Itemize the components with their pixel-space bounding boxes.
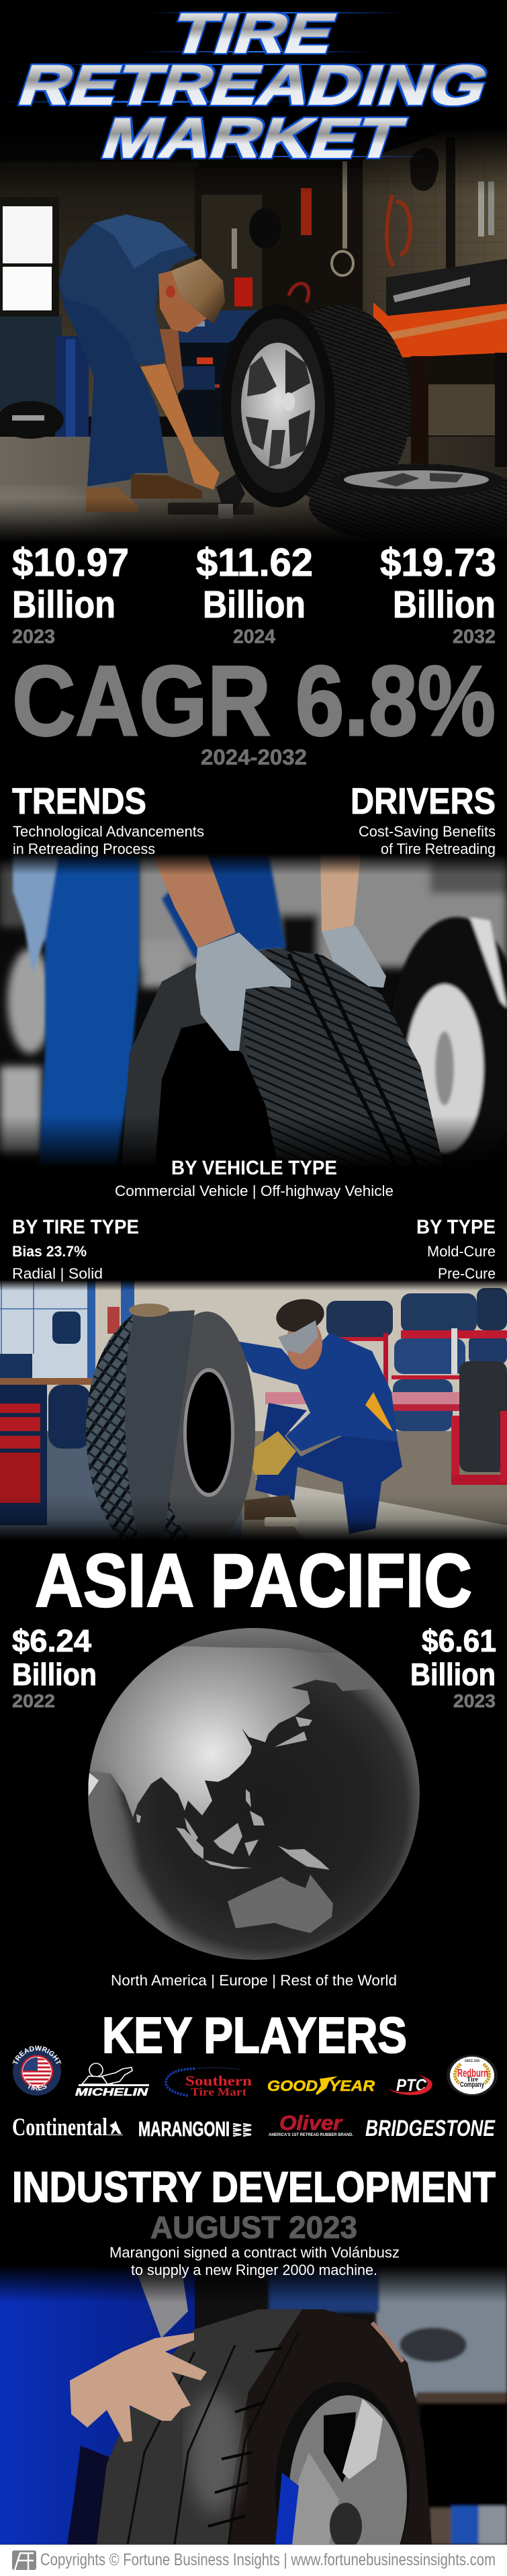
by type: Mold-Cure (427, 1243, 496, 1260)
logo: Goodyear: YEAR (329, 2077, 375, 2094)
by vehicle type: BY VEHICLE TYPE (171, 1157, 337, 1179)
market size 2024: Billion (203, 583, 306, 626)
by tire type: Bias 23.7% (12, 1243, 87, 1260)
market size 2023: 2023 (12, 626, 55, 648)
regional value 2023 (410, 1623, 496, 1711)
jacket (0, 2266, 195, 2544)
market size 2023 (12, 541, 129, 648)
logo: Southern Tire Mart: Tire Mart (191, 2086, 246, 2098)
logo: Treadwright Tires: TREADWRIGHT (12, 2045, 62, 2064)
footer (0, 2544, 507, 2576)
logo: Redburn Tire Company: Redburn (457, 2067, 488, 2079)
indian ocean glow (88, 1774, 176, 1942)
back arm (158, 329, 184, 394)
logo: Treadwright Tires: TIRES (28, 2083, 47, 2091)
development text: Marangoni signed a contract with Volánbusz (109, 2244, 400, 2261)
boots (86, 487, 139, 512)
logo: Southern Tire Mart (166, 2067, 252, 2098)
drivers (351, 780, 496, 857)
australia (228, 1875, 333, 1933)
head (158, 271, 207, 333)
development text (109, 2244, 400, 2278)
logo: PTC: PTC (396, 2076, 427, 2095)
other regions: North America | Europe | Rest of the World (111, 1972, 397, 1989)
alloy wheel (275, 2382, 410, 2576)
development text: to supply a new Ringer 2000 machine. (131, 2262, 377, 2278)
photo: mechanic in garage with tire (0, 111, 507, 544)
CAGR: 2024-2032 (201, 745, 307, 769)
backdrop (269, 2266, 507, 2544)
regional value 2022: Billion (12, 1657, 97, 1692)
blurred backdrop (0, 853, 507, 1154)
asia (88, 1646, 380, 1817)
right wheel (401, 915, 507, 1154)
red can (234, 277, 252, 306)
regional value 2022: $6.24 (12, 1623, 91, 1658)
by tire type (12, 1216, 139, 1282)
left wall (0, 161, 198, 417)
photo: mechanic's hand on tire (0, 2266, 507, 2576)
market size 2023: Billion (12, 583, 116, 626)
regional value 2023: 2023 (453, 1690, 496, 1711)
drivers: Cost-Saving Benefits (359, 823, 496, 840)
market size 2024: 2024 (233, 626, 275, 648)
floor tool (168, 474, 254, 519)
title: RETREADING (11, 54, 497, 117)
logo: Redburn Tire Company: SINCE 1954 (465, 2059, 479, 2063)
trends: in Retreading Process (13, 841, 155, 857)
tire (122, 948, 443, 1166)
hanging tools (232, 137, 494, 302)
drivers: of Tire Retreading (381, 841, 496, 857)
by type (416, 1216, 496, 1282)
logo: Redburn Tire Company: Tire (467, 2076, 479, 2084)
title: MARKET (95, 108, 411, 170)
logo: Redburn Tire Company (447, 2055, 498, 2096)
globe showing Asia Pacific (88, 1626, 420, 1960)
market size 2032 (380, 541, 496, 648)
back workshop (195, 183, 198, 261)
regional value 2023: Billion (410, 1657, 496, 1692)
photo: technician inspecting tire in workshop (0, 1280, 507, 1559)
logo: Southern Tire Mart: Southern (185, 2073, 252, 2089)
logo: Oliver (269, 2111, 353, 2137)
technician (236, 1295, 402, 1534)
logo: Goodyear (267, 2076, 375, 2095)
trousers (13, 853, 286, 1166)
big tire with alloy wheel (221, 304, 411, 507)
right wall (363, 134, 507, 359)
trends (12, 780, 204, 857)
title (0, 3, 500, 170)
trends: Technological Advancements (13, 823, 204, 840)
by tire type: BY TIRE TYPE (12, 1216, 139, 1238)
floor (0, 437, 507, 544)
gloves (195, 933, 291, 1051)
heading: key players: KEY PLAYERS (102, 2007, 407, 2063)
title: TIRE (165, 3, 344, 65)
shirt (58, 214, 197, 367)
market size 2032: $19.73 (380, 541, 496, 585)
logo: Redburn Tire Company: Company (460, 2081, 485, 2089)
photo: gloved hands holding tire (0, 853, 507, 1172)
logo: Michelin (75, 2063, 149, 2098)
arabia (88, 1772, 99, 1796)
by vehicle type (115, 1157, 394, 1199)
logo: Continental: Continental (12, 2114, 107, 2141)
logo: Oliver: AMERICA'S 1ST RETREAD RUBBER BRAND. (269, 2133, 353, 2137)
mechanic (58, 214, 225, 512)
regional value 2022: 2022 (12, 1690, 55, 1711)
by tire type: Radial | Solid (12, 1265, 103, 1282)
logo: Marangoni: MARANGONI (138, 2117, 230, 2141)
market size 2032: Billion (393, 583, 496, 626)
flat tire (309, 464, 507, 535)
regional value 2023: $6.61 (422, 1623, 496, 1658)
development date: AUGUST 2023 (150, 2210, 357, 2245)
trends: TRENDS (12, 780, 146, 822)
logo: Oliver: Oliver (279, 2111, 343, 2135)
islands (136, 1717, 330, 1870)
by vehicle type: Commercial Vehicle | Off-highway Vehicle (115, 1183, 394, 1199)
arms (152, 853, 236, 948)
floor (242, 1431, 507, 1537)
window (0, 197, 59, 316)
spokes gaps (247, 356, 277, 396)
orange table (373, 259, 507, 467)
workbench cabinet (0, 1378, 94, 1525)
market size 2023: $10.97 (12, 541, 129, 585)
tire (97, 2309, 432, 2544)
by type: Pre-Cure (438, 1265, 496, 1282)
hand (70, 2333, 207, 2442)
trousers (60, 288, 168, 486)
arctic (88, 1626, 420, 1653)
regional value 2022 (12, 1623, 97, 1711)
left window and back shelves (0, 1280, 134, 1449)
market size 2032: 2032 (453, 626, 496, 648)
logo: Treadwright Tires (12, 2045, 62, 2096)
market size 2024: $11.62 (196, 541, 313, 585)
by type: BY TYPE (416, 1216, 496, 1238)
large truck tire (86, 1303, 255, 1559)
logo: Michelin: MICHELIN (75, 2087, 148, 2098)
logo: Goodyear: GOOD (267, 2077, 318, 2094)
logo: Fortune Business Insights (12, 2550, 36, 2570)
tire racks (265, 1288, 507, 1485)
market size 2024 (196, 541, 313, 648)
blue bench (178, 310, 263, 438)
front arm (140, 363, 220, 490)
